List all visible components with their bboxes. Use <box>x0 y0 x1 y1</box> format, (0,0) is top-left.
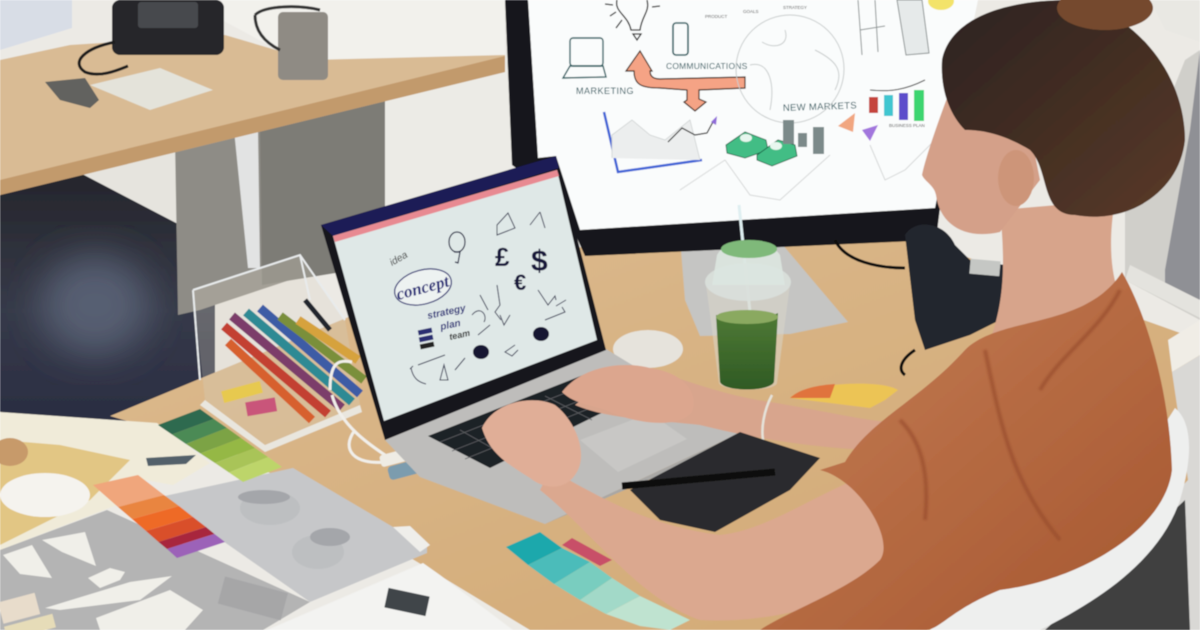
currency symbols: $ <box>531 245 548 278</box>
label: product goals strategy <box>705 5 807 19</box>
far right floor area <box>1040 355 1200 630</box>
grey board <box>0 510 310 630</box>
laptop lid frame <box>321 156 606 440</box>
background: white skirting board <box>65 135 178 224</box>
cloud icons <box>473 327 549 359</box>
icon: desk phone <box>79 0 224 74</box>
sticky tabs <box>221 381 263 403</box>
paper: fashion illustration <box>0 412 210 550</box>
green smoothie cup <box>705 205 791 390</box>
near arm <box>540 470 930 620</box>
idea label: idea <box>388 249 410 269</box>
building sketch <box>858 0 929 55</box>
icon: triangles <box>838 113 855 132</box>
coloured pencils <box>224 308 364 420</box>
strategy plan team labels: team <box>448 328 471 342</box>
icon: laptop screen bulb <box>449 232 465 263</box>
arrow: orange branching arrow <box>626 51 745 111</box>
label: new markets: NEW MARKETS <box>783 100 857 114</box>
neck <box>990 200 1135 340</box>
bracelet <box>762 395 772 444</box>
shirt folds <box>900 290 1120 540</box>
sketch sheet: portrait drawings <box>160 468 427 602</box>
swatch: orange paint card <box>93 475 225 558</box>
strategy plan team labels: plan <box>438 318 462 333</box>
concept cloud <box>391 263 455 311</box>
background: dark floor <box>0 170 215 425</box>
server stack icon <box>418 328 434 349</box>
near hand <box>482 400 581 487</box>
far hand <box>562 365 694 423</box>
icon: monitor corner <box>0 0 72 50</box>
doodle lines <box>410 212 566 384</box>
icon: light bulb <box>605 0 660 40</box>
label: marketing: MARKETING <box>576 86 634 96</box>
label: product goals strategy: PRODUCT <box>705 14 728 19</box>
currency symbols <box>495 242 548 295</box>
back desk with phone and notepad <box>0 0 505 195</box>
yellow note <box>928 0 954 10</box>
text block sketch <box>218 576 288 620</box>
graphic tablet and stylus <box>630 432 820 532</box>
keyboard <box>428 370 632 468</box>
globe drawing <box>736 15 844 123</box>
laptop <box>321 156 742 524</box>
monitor stand <box>681 244 848 336</box>
chair lower shadow <box>1045 500 1190 630</box>
trackpad <box>580 413 687 472</box>
icon: coin columns <box>783 120 824 154</box>
hair bun <box>1057 0 1153 30</box>
paper: white sheet bottom <box>267 526 513 630</box>
line chart: blue axis <box>604 112 717 172</box>
concept label: concept <box>394 271 452 304</box>
woman figure <box>482 0 1185 630</box>
background: upper white cupboard <box>222 0 505 82</box>
label: communications: COMMUNICATIONS <box>666 61 748 71</box>
white plastic mouse <box>613 330 683 368</box>
stapler <box>45 78 99 108</box>
swatch: green paint card <box>158 409 282 482</box>
label: product goals strategy: STRATEGY <box>783 5 807 10</box>
face <box>922 80 1040 234</box>
label: product goals strategy: GOALS <box>743 9 759 14</box>
faint chart lines <box>680 140 935 200</box>
orange shirt <box>760 272 1172 630</box>
background: white cabinet <box>385 50 530 260</box>
background: grey cabinet <box>175 80 385 315</box>
portrait sketch <box>238 490 300 525</box>
strategy plan team labels <box>426 303 471 342</box>
portrait sketch <box>292 528 350 569</box>
icon: phone drawing <box>673 23 688 55</box>
desk phone right <box>835 225 1005 375</box>
bar chart: business plan <box>869 80 925 121</box>
laptop screen <box>333 170 597 421</box>
woman: back of chair <box>930 408 1189 630</box>
colour wheel <box>790 384 898 408</box>
paper cut-outs on grey board <box>0 532 203 630</box>
pen cup <box>278 12 328 80</box>
shelf with binders right <box>1125 0 1200 320</box>
swatch: teal paint card <box>506 532 690 630</box>
strategy plan team labels: strategy <box>426 303 467 322</box>
currency symbols: € <box>514 270 526 295</box>
desk edge right <box>1168 320 1200 372</box>
ear <box>998 150 1034 206</box>
main desk surface <box>110 235 1200 630</box>
label: business plan: BUSINESS PLAN <box>889 123 925 128</box>
far arm <box>575 368 890 450</box>
laptop base <box>385 349 742 524</box>
icon: green money stacks <box>726 132 797 166</box>
pencil holder <box>193 255 364 452</box>
usb drive and cables <box>330 361 427 481</box>
hair <box>942 0 1185 217</box>
notepad <box>90 68 213 110</box>
currency symbols: £ <box>495 242 510 272</box>
monitor: business diagram screen <box>505 0 978 256</box>
icon: laptop drawing <box>563 38 606 78</box>
